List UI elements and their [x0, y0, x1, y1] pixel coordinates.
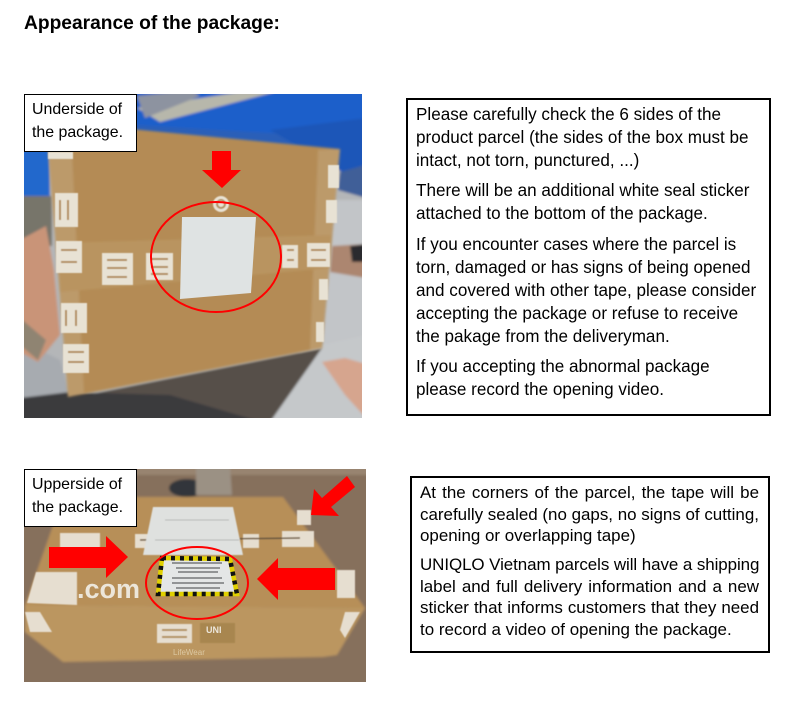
arrow: left [49, 536, 128, 578]
text block: underside instructions: please record the opening video. [416, 380, 664, 399]
label: upperside: the package. [32, 499, 123, 516]
arrow: corner [311, 476, 355, 516]
text block: underside instructions: There will be an additional white seal sticker [416, 181, 750, 200]
arrow: right [257, 558, 335, 600]
text block: underside instructions: torn, damaged or has signs of being opened [416, 258, 751, 277]
text block: underside instructions: attached to the bottom of the package. [416, 204, 708, 223]
cardboard top [25, 497, 365, 608]
text block: upperside instructions: sticker that informs customers that they need [420, 598, 759, 617]
text block: upperside instructions: opening or overlapping tape) [420, 526, 636, 545]
label: underside: Underside of [32, 101, 122, 118]
label: upperside: Upperside of [32, 476, 122, 493]
label: upperside [24, 469, 137, 527]
text block: underside instructions: intact, not torn, punctured, ...) [416, 151, 639, 170]
label: underside [24, 94, 137, 152]
text block: underside instructions: Please carefully check the 6 sides of the [416, 105, 721, 124]
red arrow [202, 151, 241, 188]
white seal sticker [180, 217, 256, 299]
text block: underside instructions [406, 98, 771, 416]
panel: upperside photo [24, 469, 366, 682]
text block: upperside instructions: At the corners of the parcel, the tape will be [420, 483, 759, 502]
text block: upperside instructions: carefully sealed (no gaps, no signs of cutting, [420, 505, 759, 524]
text block: underside instructions: If you encounter cases where the parcel is [416, 235, 736, 254]
label: underside: the package. [32, 124, 123, 141]
text block: upperside instructions: label and full delivery information and a new [420, 577, 759, 596]
text block: upperside instructions: to record a video of opening the package. [420, 620, 732, 639]
cardboard box [48, 121, 340, 397]
text block: upperside instructions [410, 476, 770, 653]
cardboard front [25, 605, 365, 662]
red circle [151, 202, 281, 312]
text block: underside instructions: the pakage from the deliveryman. [416, 327, 670, 346]
LifeWear text: LifeWear [173, 648, 205, 657]
red circle [146, 547, 248, 619]
text block: underside instructions: accepting the package or refuse to receive [416, 304, 738, 323]
text block: upperside instructions: UNIQLO Vietnam parcels will have a shipping [420, 555, 759, 574]
warning sticker [158, 558, 237, 594]
UNIQLO logo text: UNI [206, 625, 222, 635]
panel: underside photo [24, 94, 362, 418]
tape logos [48, 152, 339, 373]
.com text on box: .com [77, 574, 140, 604]
text block: underside instructions: product parcel (the sides of the box must be [416, 128, 749, 147]
text block: underside instructions: and covered with other tape, please consider [416, 281, 756, 300]
title: Appearance of the package: [24, 13, 280, 34]
text block: underside instructions: If you accepting the abnormal package [416, 357, 710, 376]
